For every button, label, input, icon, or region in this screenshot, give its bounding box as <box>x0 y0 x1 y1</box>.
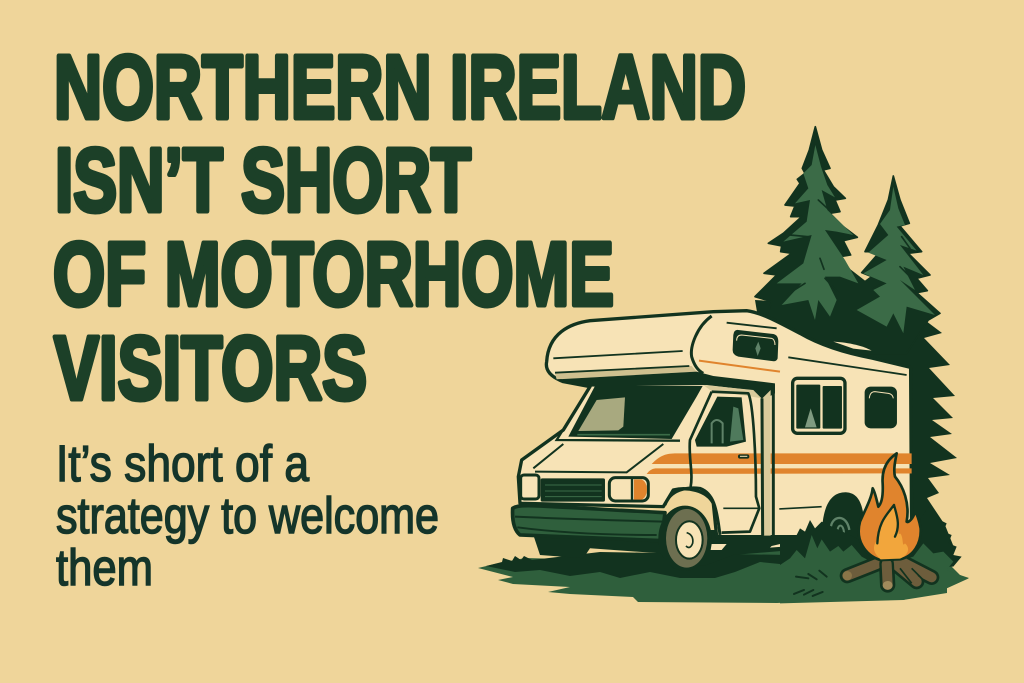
title <box>53 38 746 419</box>
hood lines <box>533 444 663 472</box>
headlights and grille <box>521 475 648 502</box>
body <box>518 311 912 537</box>
under-van shadow <box>532 530 833 568</box>
ground shadow <box>486 552 790 578</box>
motorhome <box>513 311 912 571</box>
title: ISN’T SHORT <box>55 131 471 231</box>
subtitle <box>56 435 439 596</box>
icon: campfire <box>843 453 932 590</box>
flame lines <box>877 505 898 543</box>
title: OF MOTORHOME <box>53 225 614 325</box>
bumper <box>513 506 665 541</box>
rear wheel <box>822 492 865 540</box>
roof highlight <box>833 342 872 351</box>
orange stripes <box>647 453 912 474</box>
ground <box>478 545 969 603</box>
subtitle: It’s short of a <box>56 435 310 492</box>
windshield <box>557 386 703 441</box>
alcove details <box>553 316 907 400</box>
subtitle: strategy to welcome <box>56 487 439 544</box>
subtitle: them <box>56 539 153 596</box>
door <box>690 385 822 537</box>
rear wheel and campfire <box>780 453 969 603</box>
wheel arch <box>665 488 720 535</box>
side windows <box>793 378 897 433</box>
title: VISITORS <box>54 319 367 419</box>
illustration: motorhome campsite <box>478 127 969 603</box>
title: NORTHERN IRELAND <box>54 38 746 138</box>
inner flame <box>874 505 908 559</box>
front wheel <box>658 506 712 571</box>
grass <box>780 535 969 603</box>
bushes <box>780 507 962 570</box>
ground gaps <box>711 543 786 550</box>
flame <box>859 453 921 560</box>
icon: pine trees <box>755 127 957 560</box>
logs <box>843 563 932 590</box>
grass marks <box>794 571 827 596</box>
